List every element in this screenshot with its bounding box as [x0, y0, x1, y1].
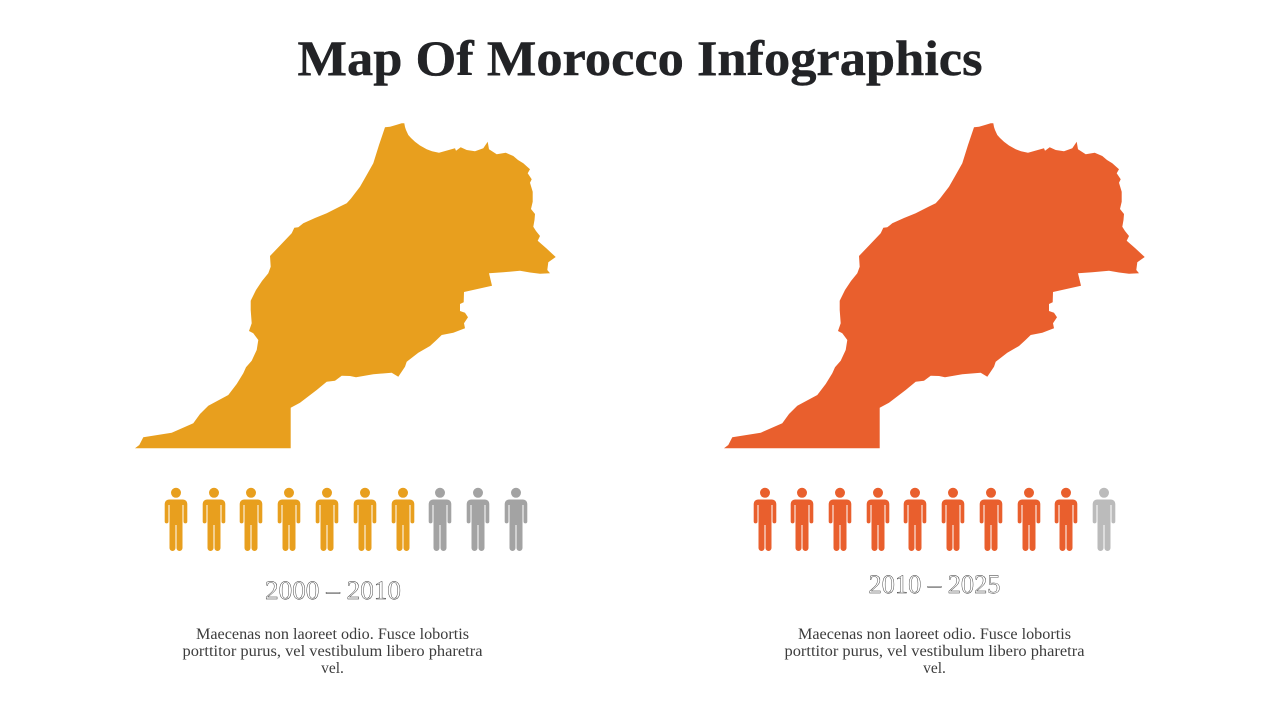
- pictogram: 9 of 10 people: [754, 488, 1115, 551]
- year label: 2010 – 2025: [868, 570, 1000, 599]
- year label: 2000 – 2010: [265, 576, 401, 605]
- description: Maecenas non laoreet odio. Fusce lobortis: [798, 626, 1071, 643]
- map: Morocco in orange: [724, 123, 1145, 448]
- panel: 2010 - 2025: [724, 123, 1145, 677]
- description: porttitor purus, vel vestibulum libero pharetra: [182, 643, 483, 660]
- description: Maecenas non laoreet odio. Fusce lobortis: [196, 626, 469, 643]
- description: porttitor purus, vel vestibulum libero pharetra: [784, 643, 1085, 660]
- pictogram: 7 of 10 people: [165, 488, 527, 551]
- description: [784, 626, 1085, 677]
- map: Morocco in amber: [135, 123, 556, 448]
- description: vel.: [923, 660, 946, 677]
- description: vel.: [321, 660, 344, 677]
- title: Map Of Morocco Infographics: [298, 30, 982, 86]
- description: [182, 626, 483, 677]
- panel: 2000 - 2010: [135, 123, 556, 677]
